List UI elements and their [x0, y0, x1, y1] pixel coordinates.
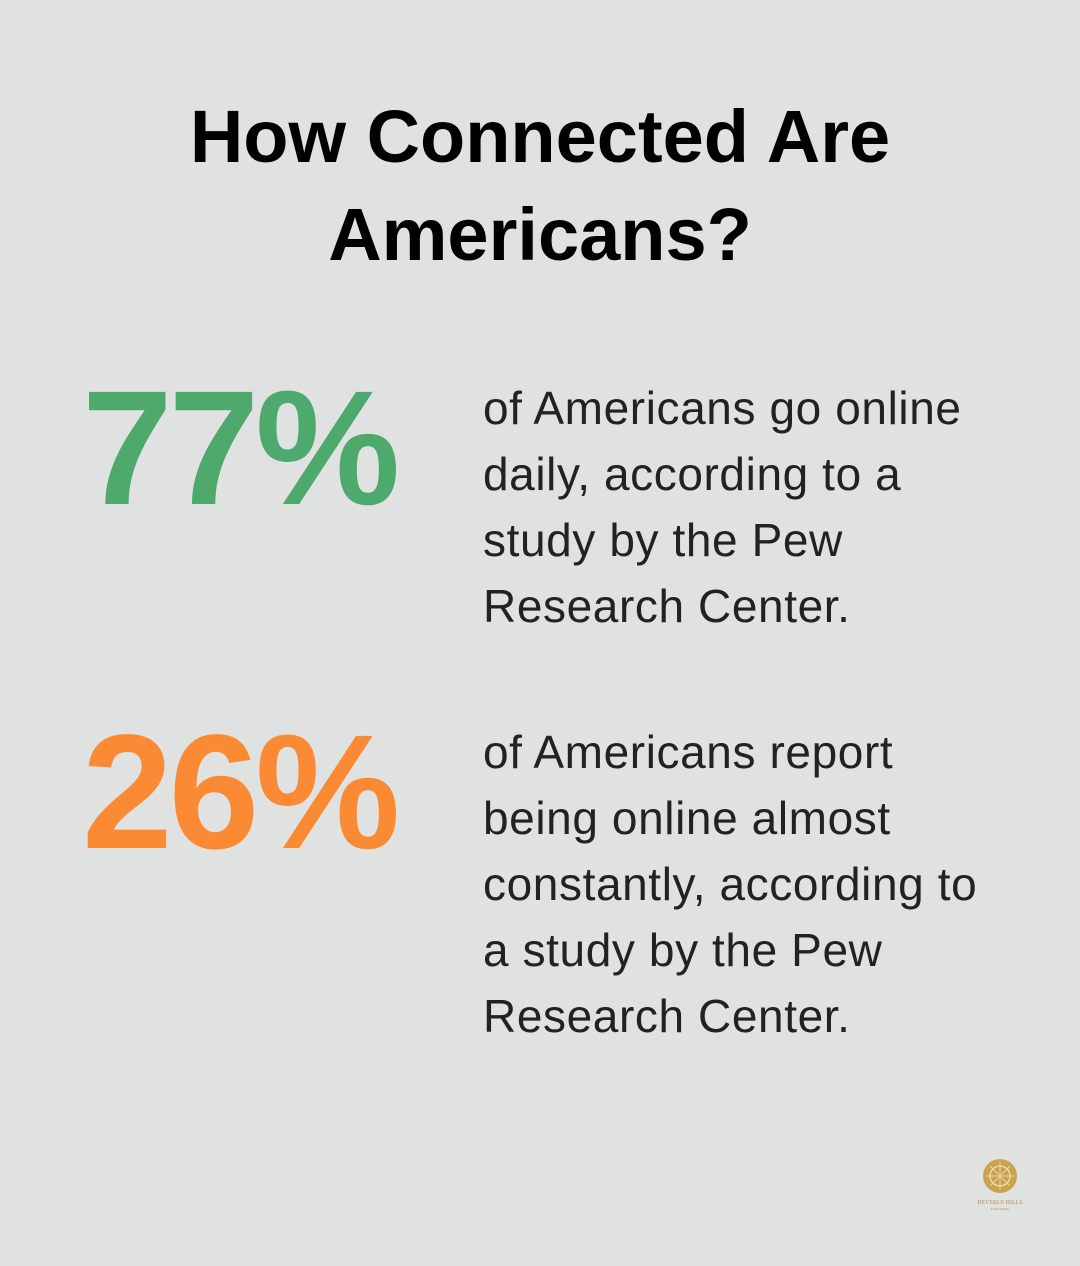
text: 26% description: constantly, according to [483, 858, 977, 910]
title: How Connected Are [190, 95, 890, 178]
title: Americans? [328, 193, 752, 276]
logo: Beverly Hills Publishing [977, 1159, 1023, 1211]
text: 77% description: study by the Pew [483, 514, 843, 566]
text: 26% description: being online almost [483, 792, 891, 844]
text: 77% description: daily, according to a [483, 448, 901, 500]
text: 26% description: of Americans report [483, 726, 893, 778]
logo: Beverly Hills Publishing: BEVERLY HILLS [977, 1200, 1023, 1206]
text: 77% description: Research Center. [483, 580, 851, 632]
text: 26% description: Research Center. [483, 990, 851, 1042]
stat: 77%: 77% [82, 356, 396, 539]
stat: 26%: 26% [82, 700, 396, 883]
text: 26% description [483, 726, 977, 1042]
text: 77% description: of Americans go online [483, 382, 962, 434]
text: 77% description [483, 382, 962, 632]
text: 26% description: a study by the Pew [483, 924, 882, 976]
title [190, 95, 890, 276]
logo: Beverly Hills Publishing: PUBLISHING [991, 1207, 1009, 1211]
